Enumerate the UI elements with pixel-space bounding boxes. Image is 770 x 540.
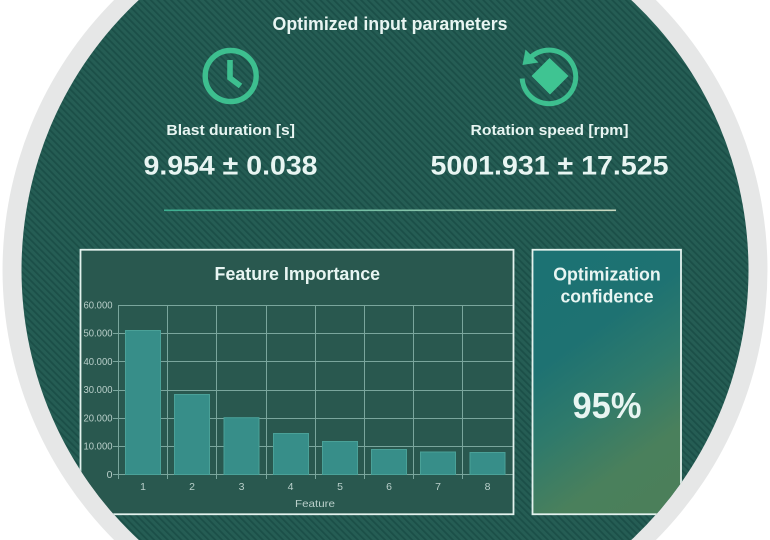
x axis labels: 3 bbox=[239, 481, 245, 493]
x axis labels: 2 bbox=[189, 481, 195, 493]
x axis labels: 5 bbox=[337, 481, 343, 493]
panel: optimization confidence bbox=[532, 250, 681, 514]
x axis labels: 7 bbox=[435, 481, 441, 493]
x axis labels: 4 bbox=[288, 481, 294, 493]
icon: rotation arrow around diamond bbox=[522, 50, 576, 104]
x axis labels: 8 bbox=[485, 481, 491, 493]
label: rotation speed: Rotation speed [rpm] bbox=[470, 122, 628, 139]
y axis labels: 40.000 bbox=[84, 356, 113, 368]
x axis labels: 1 bbox=[140, 481, 146, 493]
y axis labels: 50.000 bbox=[84, 328, 113, 340]
icon: clock bbox=[205, 50, 256, 102]
panels clipped by circle bbox=[80, 250, 681, 514]
y axis labels: 20.000 bbox=[84, 412, 113, 424]
y axis labels: 30.000 bbox=[84, 384, 113, 396]
panel: feature importance bbox=[80, 250, 514, 514]
confidence heading: Optimization bbox=[553, 264, 661, 284]
value: blast duration: 9.954 ± 0.038 bbox=[144, 150, 318, 180]
y axis labels bbox=[84, 300, 113, 481]
title: Optimized input parameters bbox=[272, 14, 508, 34]
confidence heading line 2: confidence bbox=[560, 286, 654, 306]
x axis labels: 6 bbox=[386, 481, 392, 493]
value: rotation speed: 5001.931 ± 17.525 bbox=[430, 150, 668, 180]
y axis labels: 10.000 bbox=[84, 440, 113, 452]
x axis labels bbox=[140, 483, 490, 490]
y axis labels: 0 bbox=[107, 469, 113, 481]
grid lines bbox=[113, 305, 512, 479]
bar chart bbox=[84, 300, 512, 510]
confidence value: 95% bbox=[572, 385, 642, 426]
bars bbox=[126, 330, 505, 474]
x axis title: Feature bbox=[295, 498, 335, 510]
y axis labels: 60.000 bbox=[84, 300, 113, 312]
label: blast duration: Blast duration [s] bbox=[166, 122, 295, 139]
chart heading: Feature Importance bbox=[215, 264, 380, 284]
